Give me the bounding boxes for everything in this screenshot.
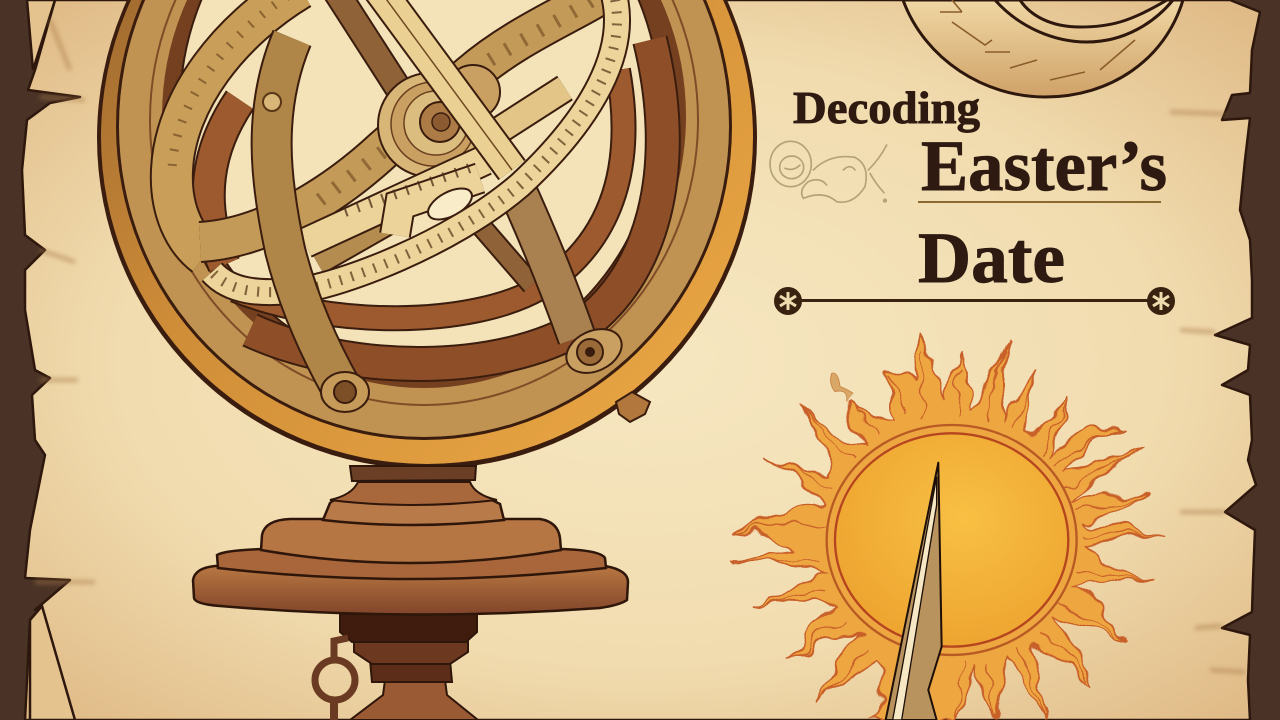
left medallion [776, 288, 800, 314]
sphere opening [180, 0, 660, 370]
underline [918, 201, 1161, 203]
needle [886, 463, 942, 720]
lower pivot [321, 372, 369, 412]
flared neck [330, 482, 497, 505]
light inner band [305, 88, 565, 264]
sketched doodle [770, 141, 887, 202]
base disc [193, 566, 628, 615]
collar [350, 466, 476, 481]
crescent moon [903, 0, 1183, 97]
sun wisp [831, 373, 853, 402]
chain ring [315, 638, 355, 720]
hub [378, 65, 500, 177]
inscribed tan band [200, 0, 610, 242]
small ornament [616, 392, 650, 422]
tier two [323, 499, 504, 525]
title [793, 82, 1167, 298]
brown lower rings [209, 40, 663, 364]
outer ring [97, 0, 757, 469]
armillary sphere [97, 0, 757, 469]
main inscribed sweep band [212, 0, 617, 292]
sun rays [732, 337, 1165, 720]
vertical meridian band [263, 38, 347, 398]
lower diagonal band [515, 185, 577, 338]
ornamental divider [776, 288, 1174, 314]
tier four [217, 549, 606, 579]
right pivot [559, 321, 629, 381]
heading: Date: Date [918, 218, 1065, 298]
sun disc [827, 425, 1077, 655]
heading: Decoding: Decoding [793, 82, 980, 133]
upper diagonal band [378, 0, 512, 170]
right medallion [1148, 288, 1174, 314]
struts [335, 0, 532, 285]
pedestal [193, 466, 628, 720]
tier three [261, 519, 561, 563]
sun [732, 337, 1165, 720]
lower column [340, 614, 478, 720]
upper-left gold ring [172, 0, 300, 255]
heading: Easter's: Easter’s [921, 126, 1167, 206]
